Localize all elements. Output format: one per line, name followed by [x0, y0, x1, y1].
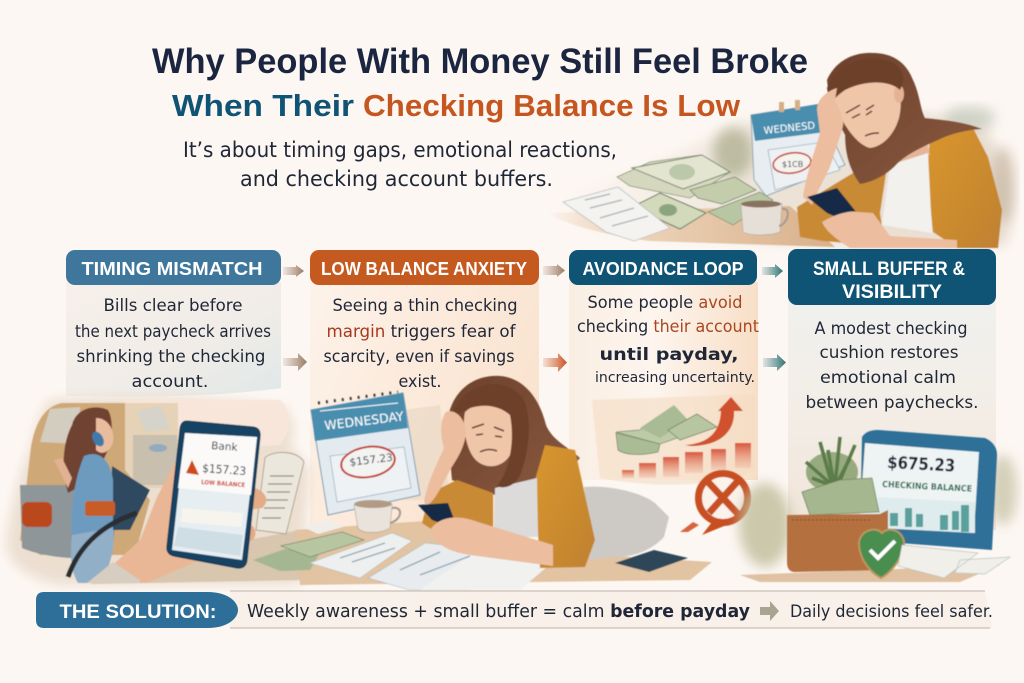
title: Why People With Money Still Feel Broke — [152, 42, 808, 81]
text block: checking their account — [577, 317, 759, 337]
text block — [577, 293, 759, 386]
phone on desk — [615, 550, 688, 572]
equation text: Weekly awareness + small buffer = calm before payday — [247, 602, 751, 622]
subtitle: It’s about timing gaps, emotional reactions, — [183, 138, 617, 162]
hand and forearm — [822, 211, 957, 248]
woman on phone — [54, 407, 115, 583]
raised arm — [803, 88, 843, 205]
balance card: CHECKING BALANCE — [882, 480, 972, 495]
subtitle: and checking account buffers. — [240, 167, 553, 191]
balance card — [859, 430, 997, 550]
pillow — [584, 487, 669, 560]
arrow: avoidance to buffer lower — [763, 354, 786, 371]
heart check icon — [859, 530, 904, 578]
text block: scarcity, even if savings — [324, 347, 515, 367]
illustration: gas station scene — [6, 397, 310, 585]
gas station kiosk — [123, 403, 178, 488]
text block — [75, 296, 271, 392]
text block: Seeing a thin checking — [332, 296, 518, 316]
text block: A modest checking — [814, 319, 968, 339]
up arrow — [685, 397, 743, 446]
panel body — [788, 300, 996, 530]
pill label — [36, 592, 238, 628]
shirt — [494, 478, 538, 537]
phone with low balance alert — [167, 421, 260, 568]
facial features — [472, 424, 504, 452]
illustration: worried woman with calendar and papers — [253, 376, 712, 590]
car — [20, 403, 150, 558]
text block: Bills clear before — [104, 296, 242, 316]
cash — [616, 405, 717, 454]
coffee mug — [354, 500, 400, 532]
panel body — [569, 282, 758, 480]
cardigan right — [535, 445, 595, 568]
arrow: anxiety to avoidance lower — [543, 353, 567, 372]
foliage — [739, 437, 1017, 567]
ear — [894, 85, 904, 103]
title: When Their — [172, 88, 354, 123]
wednesday calendar: $157.23 — [349, 452, 393, 469]
text block: between paychecks. — [806, 393, 978, 413]
bill papers — [563, 187, 670, 241]
wallet — [787, 478, 888, 572]
panel: timing mismatch — [66, 250, 281, 397]
heading: TIMING MISMATCH — [82, 258, 262, 279]
desk — [295, 520, 712, 585]
text block — [806, 319, 978, 413]
arrow: timing to anxiety top — [283, 265, 304, 277]
documents — [310, 533, 555, 590]
woman — [418, 376, 595, 568]
heading — [310, 250, 539, 285]
cardigan right side — [927, 128, 1002, 248]
phone with low balance alert: Bank — [211, 440, 239, 454]
text block: the next paycheck arrives — [75, 322, 271, 342]
face — [464, 402, 517, 466]
pile of cash — [617, 155, 773, 229]
wednesday calendar: WEDNESDAY — [324, 408, 405, 433]
wall calendar: WEDNESD — [763, 121, 816, 137]
background wash — [540, 111, 1011, 246]
text block: exist. — [398, 372, 442, 392]
desk — [545, 206, 835, 247]
fringe — [827, 58, 903, 107]
text block: margin triggers fear of — [326, 322, 516, 342]
hair — [827, 53, 982, 184]
subtitle — [183, 138, 617, 191]
text block: until payday, — [600, 345, 738, 365]
desk shadow — [740, 565, 1000, 582]
heading: SMALL BUFFER & — [813, 259, 965, 280]
heading — [66, 250, 281, 285]
wall calendar — [751, 100, 845, 196]
wall wash — [400, 405, 450, 500]
text block — [324, 296, 518, 392]
phone in hand — [418, 503, 458, 530]
crossed circle icon — [680, 474, 748, 535]
shrubbery — [713, 106, 1015, 223]
cash — [253, 532, 364, 571]
shirt — [882, 153, 932, 233]
panel: low balance anxiety — [310, 250, 539, 530]
back hair — [447, 376, 580, 495]
scene backdrop — [6, 397, 310, 585]
arrow: anxiety to avoidance top — [543, 264, 565, 277]
title: Checking Balance Is Low — [363, 88, 741, 123]
growth bars — [622, 443, 751, 478]
cardigan left side — [797, 167, 887, 246]
receipt — [256, 452, 304, 534]
notepad — [303, 520, 343, 534]
facial features — [846, 105, 879, 136]
strip background — [230, 591, 992, 628]
balance card: $675.23 — [887, 453, 956, 477]
coffee mug — [741, 200, 788, 235]
heading — [569, 250, 757, 285]
text block: emotional calm — [820, 368, 956, 388]
receipts — [898, 545, 1010, 578]
phone with low balance alert: LOW BALANCE — [201, 479, 245, 489]
fuel hose — [68, 513, 137, 577]
pill label: THE SOLUTION: — [60, 602, 216, 623]
heading: LOW BALANCE ANXIETY — [321, 259, 527, 279]
text block: account. — [132, 372, 208, 392]
text block: increasing uncertainty. — [595, 370, 755, 386]
panel: avoidance loop — [569, 250, 759, 480]
illustration: checking balance and wallet — [739, 430, 1017, 582]
result text: Daily decisions feel safer. — [790, 602, 993, 621]
phone with low balance alert: $157.23 — [202, 461, 247, 478]
woman — [797, 53, 1002, 248]
neck — [880, 135, 930, 168]
text block: Some people avoid — [588, 293, 742, 313]
hand and forearm — [430, 517, 553, 566]
panel body — [310, 282, 539, 530]
arrow — [760, 601, 779, 621]
text block: cushion restores — [820, 343, 959, 363]
heading: AVOIDANCE LOOP — [582, 258, 744, 279]
illustration: avoidance money chart — [592, 394, 756, 535]
wash — [592, 394, 756, 485]
face — [833, 82, 901, 148]
raised arm — [424, 411, 466, 505]
illustration: worried woman at desk with money and calendar — [540, 53, 1015, 248]
wednesday calendar — [311, 392, 420, 515]
panel: small buffer and visibility — [788, 249, 996, 530]
heading: VISIBILITY — [842, 282, 942, 303]
wall calendar: $1CB — [782, 160, 803, 169]
text block: shrinking the checking — [76, 347, 266, 367]
hand holding phone — [87, 463, 266, 583]
panel body — [66, 282, 281, 397]
phone — [807, 188, 857, 226]
title — [152, 42, 808, 123]
arrow: avoidance to buffer top — [762, 264, 783, 278]
hair front — [450, 384, 529, 487]
cardigan left — [422, 480, 493, 540]
heading — [788, 249, 996, 305]
solution strip — [36, 591, 993, 628]
arrow: timing to anxiety lower — [283, 353, 307, 371]
